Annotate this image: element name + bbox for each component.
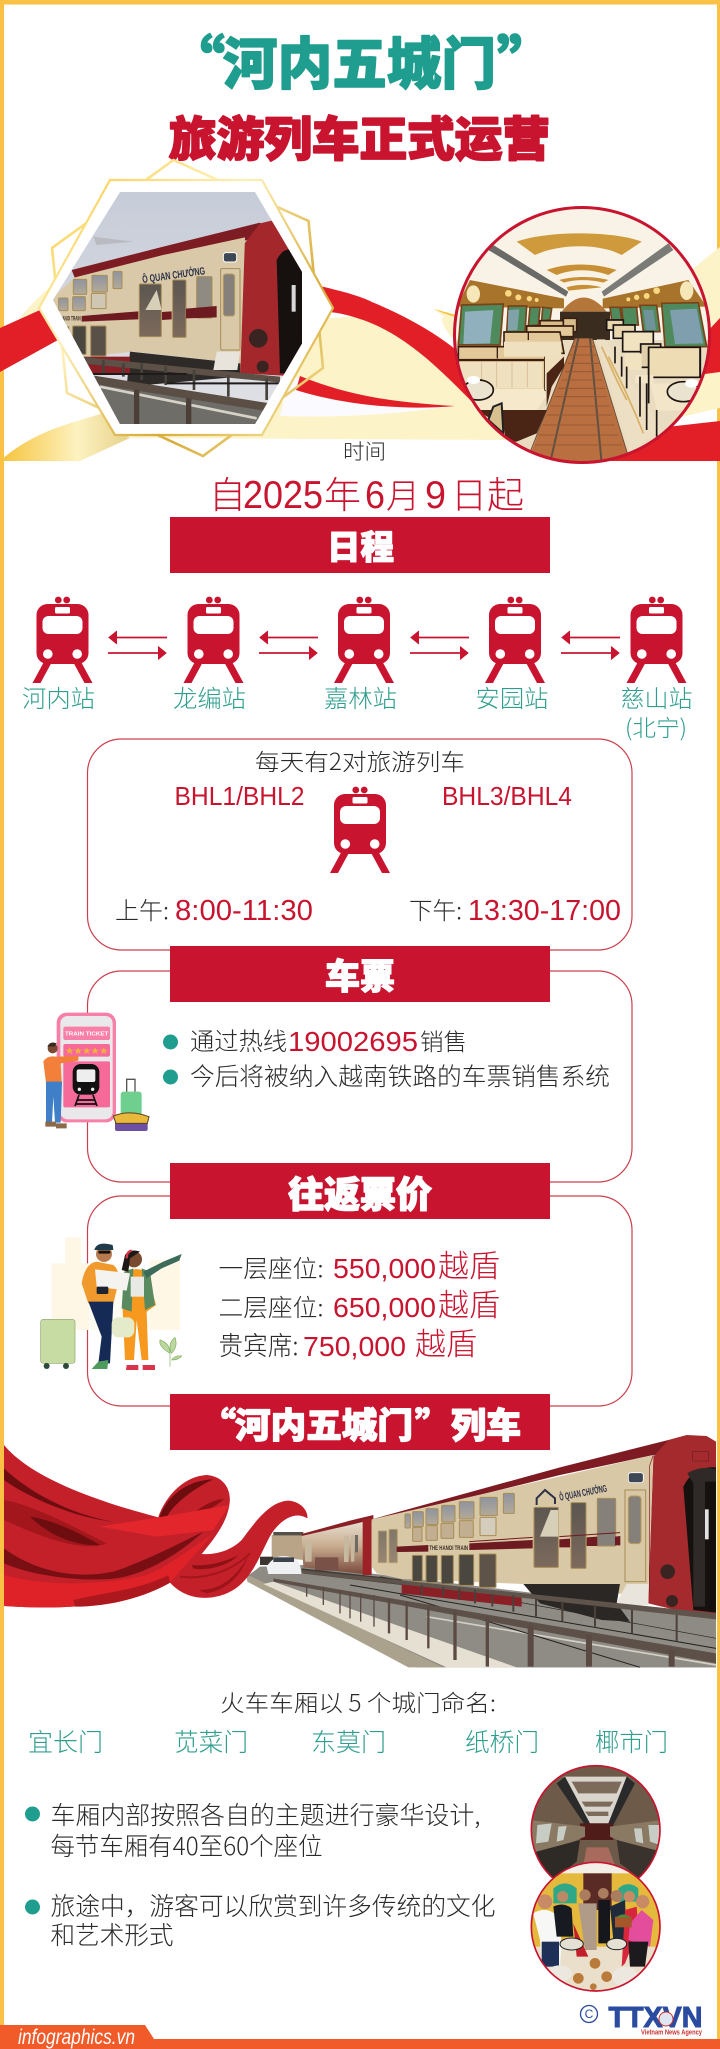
icon: travellers illustration	[41, 1237, 182, 1370]
bullet list: 旅途中，游客可以欣赏到许多传统的文化	[50, 1887, 496, 1923]
station names: 龙编站	[173, 679, 246, 714]
panel: daily trains: 13:30-17:00	[468, 895, 621, 927]
title	[167, 17, 555, 101]
scene: train on bridge: Ô QUAN CHƯỞNG	[558, 1482, 608, 1504]
footer bar with site name	[0, 2025, 720, 2049]
title: 河内五城门	[223, 20, 496, 101]
section bar: round-trip fares	[170, 1163, 550, 1219]
panel: daily trains: 下午:	[409, 891, 462, 926]
bullet list: 每节车厢有40至60个座位	[50, 1827, 322, 1863]
logo: TTXVN: TTXVN	[608, 2002, 702, 2034]
hero photo: train in hexagon: HANOI TRAIN	[60, 316, 81, 323]
section bar: tickets: 车票	[325, 949, 395, 1000]
panel: fares: 越盾	[438, 1280, 500, 1325]
panel: fares: 二层座位:	[218, 1288, 324, 1323]
scene: train on bridge: THE HANOI TRAIN	[429, 1545, 468, 1552]
date: 2025	[243, 474, 323, 517]
station names: 嘉林站	[324, 679, 397, 714]
icon: phone ticket illustration: TRAIN TICKET	[65, 1031, 109, 1037]
station names: (北宁)	[625, 709, 687, 743]
section bar: train	[170, 1394, 550, 1450]
panel: daily trains: 每天有2对旅游列车	[255, 743, 465, 777]
footer bar with site name: infographics.vn	[18, 2026, 135, 2049]
icon: Tu Son station train	[626, 597, 686, 683]
date: 月	[386, 469, 420, 518]
text: carriages named after gates: 苋菜门	[174, 1723, 248, 1759]
logo: TTXVN: Vietnam News Agency	[641, 2028, 703, 2036]
section bar: schedule: 日程	[327, 520, 394, 569]
section bar: round-trip fares: 往返票价	[288, 1166, 432, 1218]
date	[209, 465, 524, 519]
section bar: train: 河内五城门	[235, 1398, 413, 1449]
date: 起	[487, 465, 524, 519]
photo: performers small circle	[530, 1862, 662, 1993]
panel: fares: 一层座位:	[218, 1249, 324, 1284]
icon: phone ticket illustration	[43, 1013, 149, 1131]
text: carriages named after gates: 椰市门	[595, 1723, 668, 1759]
section bar: train: ”	[415, 1398, 450, 1449]
text: carriages named after gates: 火车车厢以 5 个城门命名:	[220, 1684, 496, 1718]
date: 日	[451, 467, 487, 519]
bullet list	[25, 1796, 496, 1952]
panel: fares: 越盾	[438, 1241, 500, 1286]
logo: TTXVN: C	[585, 2007, 594, 2021]
section bar: schedule	[170, 517, 550, 573]
text: carriages named after gates	[28, 1684, 668, 1759]
station names	[22, 679, 692, 743]
icon: Yen Vien station train	[485, 597, 545, 683]
panel: daily trains: BHL1/BHL2	[174, 781, 304, 811]
photo: carriage interior small circle	[530, 1764, 661, 1878]
panel: fares: 贵宾席:	[218, 1326, 298, 1363]
bullet list: 车厢内部按照各自的主题进行豪华设计,	[50, 1796, 480, 1832]
panel: fares: 越盾	[415, 1319, 477, 1364]
scene: train on bridge	[247, 1435, 716, 1667]
title: “	[167, 17, 225, 101]
icon: Long Bien station train	[184, 597, 244, 683]
station names: 河内站	[22, 679, 95, 714]
panel: tickets: 通过热线	[190, 1022, 287, 1057]
panel: tickets	[88, 971, 632, 1182]
section bar: train: “	[201, 1398, 236, 1449]
panel: daily trains: 上午:	[115, 891, 169, 926]
station names: 慈山站	[620, 679, 692, 714]
panel: daily trains: BHL3/BHL4	[442, 781, 572, 811]
panel: fares: 750,000	[303, 1331, 406, 1362]
hero photo: train in hexagon	[39, 180, 333, 435]
time label: 时间	[343, 436, 386, 466]
hero photo: carriage interior circle	[453, 207, 713, 467]
panel: fares: 650,000	[333, 1292, 436, 1323]
panel: tickets: 19002695	[288, 1026, 418, 1057]
hero photo: train in hexagon: Ô QUAN CHƯỞNG	[141, 264, 206, 286]
icon: phone ticket illustration: ★★★★★	[65, 1046, 108, 1055]
title: ”	[497, 17, 555, 101]
panel: fares: 550,000	[333, 1253, 436, 1284]
icon: red ribbon	[4, 1445, 307, 1607]
section bar: tickets	[170, 946, 550, 1002]
subtitle: 旅游列车正式运营	[169, 101, 550, 170]
station names: 安园站	[476, 679, 548, 714]
bullet list: 和艺术形式	[50, 1916, 174, 1952]
arrows between stations	[108, 631, 620, 660]
text: carriages named after gates: 纸桥门	[465, 1723, 539, 1759]
station route	[22, 597, 692, 743]
icon: Gia Lam station train	[334, 597, 394, 683]
hero background ribbons	[0, 247, 720, 461]
section bar: train: 列车	[451, 1398, 521, 1449]
date: 9	[425, 474, 446, 517]
panel: daily trains	[88, 739, 632, 950]
text: carriages named after gates: 宜长门	[28, 1723, 103, 1759]
gold star frame	[52, 160, 323, 456]
panel: tickets: 销售	[420, 1023, 467, 1057]
panel: fares	[88, 1196, 632, 1406]
panel: tickets: 今后将被纳入越南铁路的车票销售系统	[190, 1058, 610, 1093]
date: 自	[209, 465, 246, 519]
icon: Hanoi station train	[32, 597, 92, 683]
panel: daily trains: 8:00-11:30	[175, 895, 313, 927]
text: carriages named after gates: 东莫门	[311, 1723, 386, 1759]
date: 6	[365, 474, 385, 517]
date: 年	[324, 465, 361, 519]
